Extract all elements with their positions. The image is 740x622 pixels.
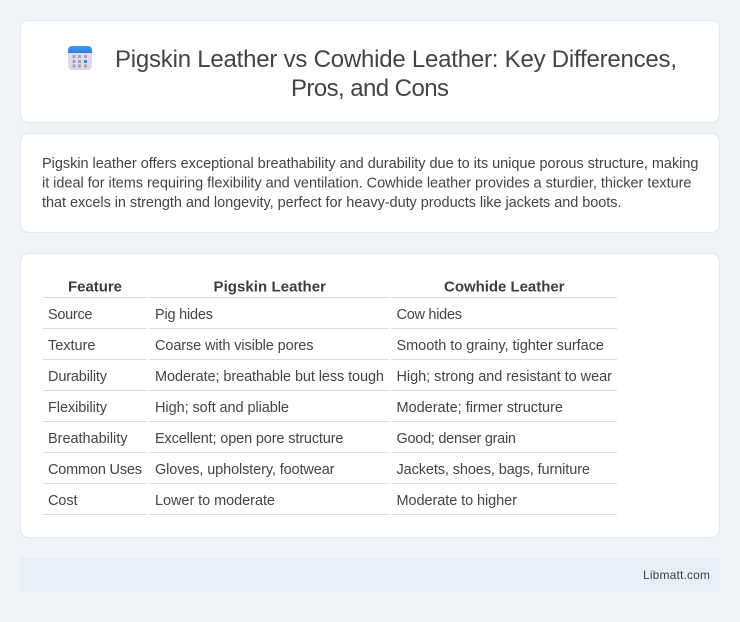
row: cost [48, 493, 517, 509]
row: cost: Lower to moderate [155, 493, 275, 509]
footer credit: Libmatt.com [643, 568, 710, 582]
table header: Pigskin Leather [214, 278, 326, 296]
row: common uses: Jackets, shoes, bags, furniture [396, 462, 590, 478]
table header [68, 278, 565, 296]
row: breathability: Good; denser grain [396, 431, 516, 447]
row: common uses: Common Uses [48, 462, 142, 478]
row: texture [48, 338, 604, 354]
row: flexibility [48, 400, 563, 416]
row: texture: Smooth to grainy, tighter surface [396, 338, 604, 354]
row: cost: Cost [48, 493, 78, 509]
row: flexibility: High; soft and pliable [155, 400, 289, 416]
table header: Feature [68, 278, 122, 296]
row: durability [48, 369, 612, 385]
row: common uses [48, 462, 590, 478]
row: breathability: Breathability [48, 431, 128, 447]
row: source: Source [48, 307, 92, 323]
row: texture: Coarse with visible pores [155, 338, 314, 354]
text block: summary: that excels in strength and longevity, perfect for heavy-duty products like jackets and boots. [42, 195, 622, 211]
panel: intro text [20, 134, 720, 232]
text block: summary: Pigskin leather offers exceptional breathability and durability due to its unique porous structure, making [42, 156, 698, 172]
footer [20, 558, 720, 592]
title [115, 46, 677, 102]
row: source: Cow hides [396, 307, 462, 323]
row: common uses: Gloves, upholstery, footwear [155, 462, 335, 478]
text block: summary: it ideal for items requiring flexibility and ventilation. Cowhide leather provides a sturdier, thicker texture [42, 176, 692, 192]
row: durability: Moderate; breathable but less tough [155, 369, 384, 385]
row: durability: High; strong and resistant to wear [396, 369, 612, 385]
row: durability: Durability [48, 369, 108, 385]
panel: comparison table [20, 254, 720, 538]
icon: calendar [68, 46, 92, 70]
text block: summary [42, 156, 698, 211]
panel: title card [20, 20, 720, 122]
table header: Cowhide Leather [444, 278, 565, 296]
row: breathability [48, 431, 516, 447]
row: breathability: Excellent; open pore structure [155, 431, 344, 447]
row: source [48, 307, 462, 323]
title: Pigskin Leather vs Cowhide Leather: Key Differences, [115, 46, 677, 73]
row: cost: Moderate to higher [396, 493, 517, 509]
title: Pros, and Cons [291, 75, 449, 102]
row: texture: Texture [48, 338, 96, 354]
row: source: Pig hides [155, 307, 213, 323]
row: flexibility: Flexibility [48, 400, 108, 416]
row: flexibility: Moderate; firmer structure [396, 400, 563, 416]
